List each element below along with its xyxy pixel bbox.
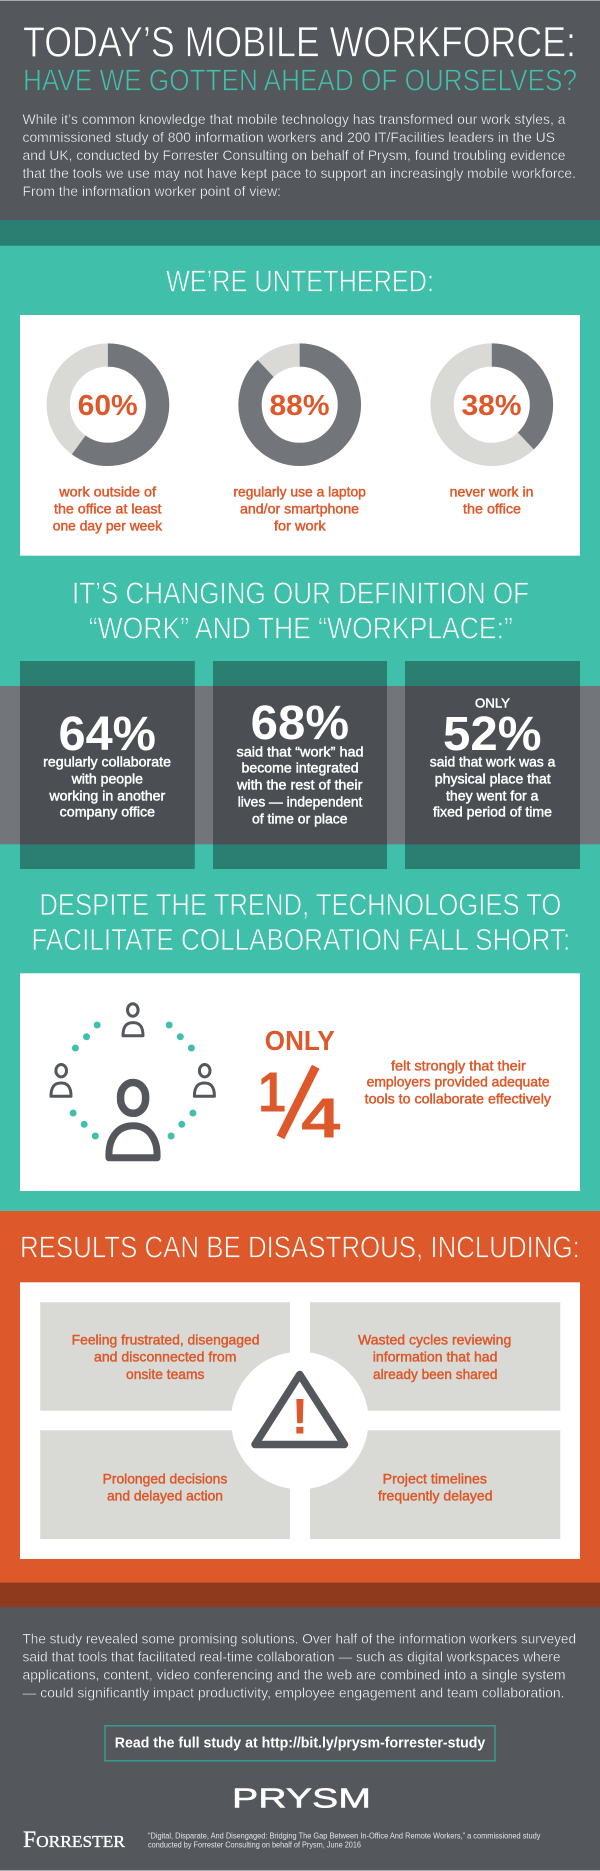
call to action: Read the full study at http://bit.ly/prysm-forrester-study	[115, 1735, 486, 1752]
cell: prolonged decisions: Prolonged decisions	[103, 1471, 227, 1487]
stat: only one quarter: 4	[301, 1086, 341, 1150]
gray band	[0, 686, 600, 844]
intro paragraph: that the tools we use may not have kept pace to support an increasingly mobile workforce.	[22, 165, 576, 181]
donut: 60%	[58, 355, 158, 454]
stat card: 52%: 52%	[443, 708, 542, 761]
caption: 88%: regularly use a laptop	[233, 484, 366, 500]
stat card: 64%: working in another	[48, 788, 166, 804]
stat: only one quarter: 1	[258, 1061, 286, 1125]
heading: we're untethered: WE’RE UNTETHERED:	[166, 264, 434, 299]
cell: frustrated: and disconnected from	[94, 1349, 236, 1365]
footnote: conducted by Forrester Consulting on behalf of Prysm, June 2016	[148, 1841, 361, 1850]
cell: frustrated: onsite teams	[126, 1366, 204, 1382]
text: felt strongly: tools to collaborate effectively	[365, 1090, 551, 1106]
cell: frustrated: Feeling frustrated, disengaged	[72, 1332, 259, 1348]
intro paragraph: commissioned study of 800 information workers and 200 IT/Facilities leaders in the US	[22, 129, 555, 145]
intro paragraph: While it’s common knowledge that mobile technology has transformed our work styles, a	[22, 111, 566, 127]
stat card: 52%: they went for a	[446, 788, 539, 804]
caption: 60%: one day per week	[53, 518, 163, 534]
icon: warning triangle	[231, 1352, 369, 1489]
dark teal strip	[0, 220, 600, 246]
closing paragraph: — could significantly impact productivity, employee engagement and team collaboration.	[22, 1685, 564, 1701]
caption: 38%	[450, 484, 534, 517]
logo: Prysm: PRYSM	[232, 1783, 371, 1814]
closing paragraph: said that tools that facilitated real-time collaboration — such as digital workspaces where	[22, 1649, 561, 1665]
heading: changing definition	[72, 575, 529, 645]
cell: project timelines	[310, 1430, 560, 1539]
caption: 60%	[53, 484, 163, 534]
teal background	[0, 246, 600, 1211]
caption: 88%: for work	[274, 518, 327, 534]
closing paragraph: applications, content, video conferencing and the web are combined into a single system	[22, 1667, 566, 1683]
closing paragraph: The study revealed some promising solutions. Over half of the information workers surveyed	[22, 1631, 576, 1647]
icon: warning triangle: !	[292, 1388, 308, 1444]
stat card: 52%: physical place that	[435, 771, 551, 787]
icon: connected people	[51, 1004, 214, 1158]
stat card: 52%	[405, 661, 580, 869]
donut: 38%	[442, 355, 542, 454]
stat card: 68%	[213, 661, 387, 869]
footnote: “Digital, Disparate, And Disengaged: Bridging The Gap Between In-Office And Remote Workers,” a commissioned study	[148, 1832, 540, 1841]
donut: 88%: 88%	[270, 390, 330, 422]
caption: 88%	[233, 484, 366, 534]
intro paragraph: From the information worker point of view:	[22, 183, 281, 199]
panel: collaboration	[20, 973, 580, 1191]
panel: results	[0, 1211, 600, 1583]
donut: 60%: 60%	[78, 390, 138, 422]
closing paragraph	[22, 1631, 576, 1701]
cell: frustrated	[40, 1302, 290, 1411]
caption: 88%: and/or smartphone	[240, 501, 359, 517]
stat card: 64%: regularly collaborate	[43, 754, 171, 770]
donut: 38%: 38%	[462, 390, 522, 422]
panel: header	[0, 0, 600, 220]
stat card: 68%: with the rest of their	[236, 776, 363, 792]
heading: changing definition: “WORK” AND THE “WORKPLACE:”	[89, 610, 513, 645]
stat card: 68%: said that “work” had	[236, 744, 364, 760]
stat card: 52%: ONLY	[475, 696, 510, 711]
stat card: 64%: 64%	[58, 708, 156, 761]
stat: only one quarter: ONLY	[265, 1025, 335, 1056]
stat card: 64%: with people	[71, 771, 143, 787]
stat card: 52%: said that work was a	[430, 754, 556, 770]
text: felt strongly: employers provided adequate	[367, 1074, 550, 1090]
caption: 60%: work outside of	[58, 484, 156, 500]
intro paragraph: and UK, conducted by Forrester Consulting on behalf of Prysm, found troubling evidence	[22, 147, 566, 163]
caption: 60%: the office at least	[54, 501, 162, 517]
text: felt strongly	[365, 1058, 551, 1106]
cell: project timelines: Project timelines	[383, 1471, 487, 1487]
cell: wasted cycles: already been shared	[373, 1366, 498, 1382]
stat card: 52%: fixed period of time	[433, 804, 552, 820]
cell: wasted cycles: Wasted cycles reviewing	[358, 1332, 511, 1348]
stat: only one quarter	[258, 1025, 341, 1150]
stat card: 68%: become integrated	[242, 760, 359, 776]
stat card: 64%: company office	[60, 804, 155, 820]
stat card: 68%: 68%	[251, 697, 349, 750]
stat card: 68%: lives — independent	[238, 793, 362, 809]
logo: Forrester: FORRESTER	[23, 1827, 126, 1852]
heading: despite the trend	[31, 887, 570, 957]
caption: 38%: the office	[463, 501, 521, 517]
caption: 38%: never work in	[450, 484, 534, 500]
stat card: 68%: of time or place	[252, 810, 348, 826]
cell: wasted cycles	[310, 1302, 560, 1411]
cell: prolonged decisions: and delayed action	[107, 1488, 223, 1504]
intro paragraph	[22, 111, 576, 199]
dark orange strip	[0, 1583, 600, 1607]
heading: changing definition: IT’S CHANGING OUR DEFINITION OF	[72, 575, 529, 610]
donut: 88%	[250, 355, 349, 454]
stat card: 64%	[20, 661, 195, 869]
footnote	[148, 1832, 540, 1850]
panel: donut charts	[20, 315, 580, 556]
panel: footer	[0, 1607, 600, 1871]
cell: project timelines: frequently delayed	[378, 1488, 492, 1504]
cell: prolonged decisions	[40, 1430, 290, 1539]
call to action	[105, 1726, 495, 1761]
cell: wasted cycles: information that had	[373, 1349, 498, 1365]
text: felt strongly: felt strongly that their	[391, 1058, 526, 1074]
